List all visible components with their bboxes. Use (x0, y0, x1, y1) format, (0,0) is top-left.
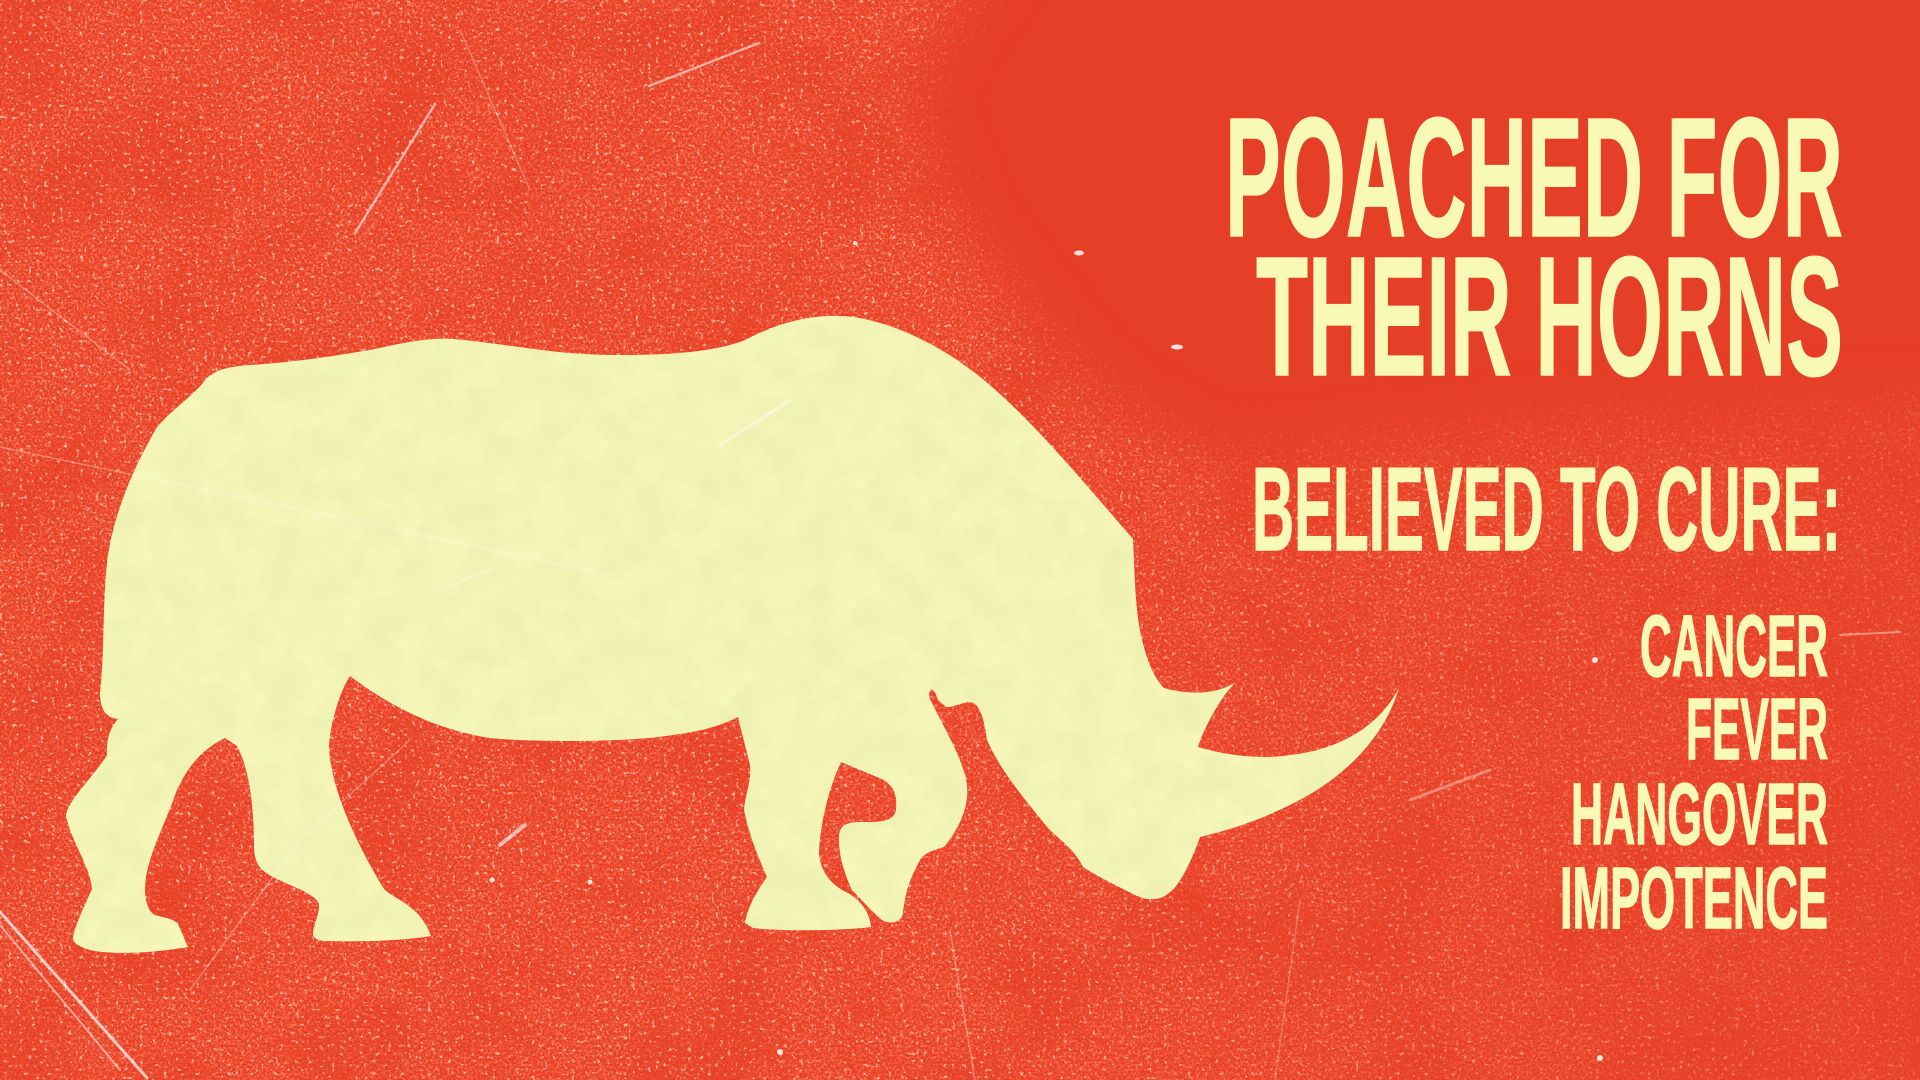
list of believed cures (1560, 598, 1828, 947)
rhino silhouette (66, 316, 1399, 953)
title (1225, 83, 1843, 412)
